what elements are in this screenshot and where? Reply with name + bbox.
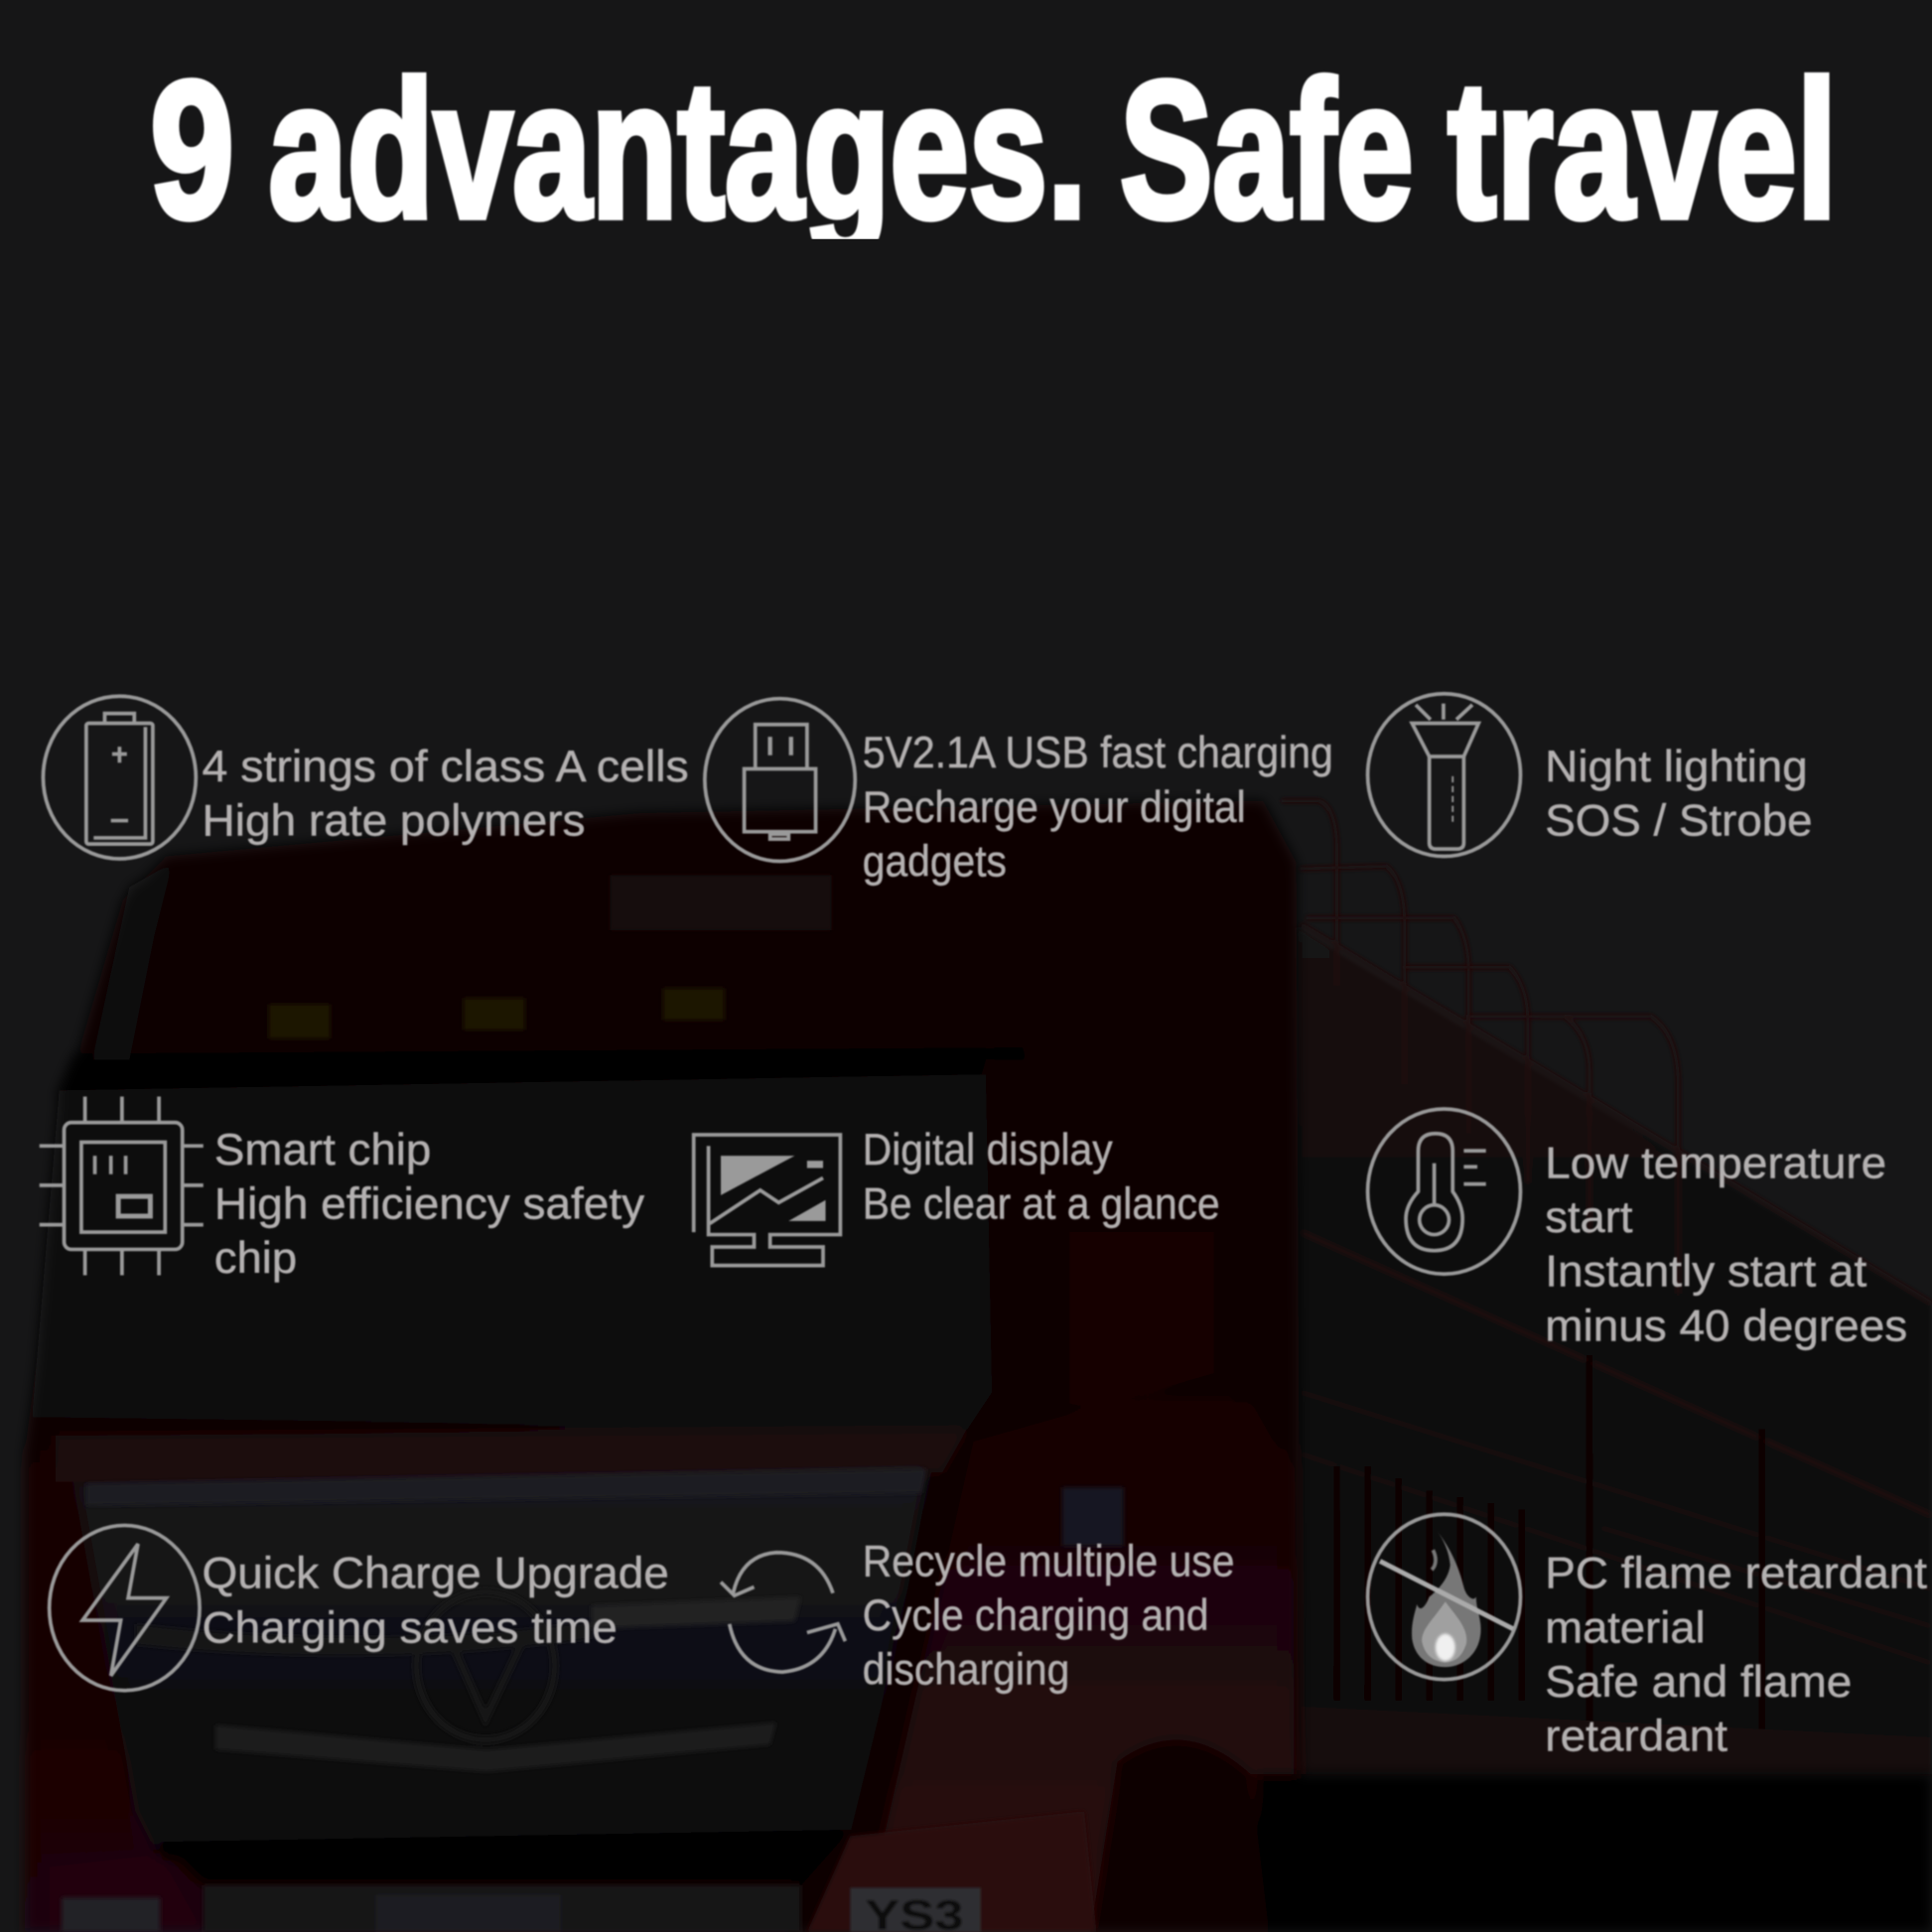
truck cargo fence	[1282, 801, 1932, 1774]
text: low temperature	[1545, 1139, 1907, 1350]
text: flame retardant	[1545, 1550, 1928, 1761]
license plate	[850, 1887, 981, 1932]
feature: quick charge	[50, 1525, 669, 1691]
text: quick charge: Charging saves time	[203, 1603, 618, 1652]
text: recycle: Recycle multiple use	[863, 1537, 1235, 1586]
title: Safe	[1120, 40, 1414, 258]
text: low temperature: Low temperature	[1545, 1139, 1886, 1187]
text: night lighting	[1545, 743, 1813, 845]
text: USB: 5V2.1A USB fast charging	[863, 729, 1333, 777]
text: smart chip	[214, 1126, 645, 1283]
text: cells: High rate polymers	[203, 796, 586, 845]
text: flame retardant: retardant	[1545, 1713, 1728, 1761]
text: smart chip: Smart chip	[214, 1126, 431, 1174]
icon: flashlight	[1368, 694, 1520, 857]
text: digital display: Be clear at a glance	[863, 1179, 1220, 1228]
title	[152, 71, 1831, 239]
icon: lightning bolt	[50, 1525, 200, 1691]
text: recycle: discharging	[863, 1646, 1069, 1695]
icon: USB plug	[705, 699, 855, 862]
icon: thermometer	[1368, 1109, 1520, 1274]
text: smart chip: High efficiency safety	[214, 1179, 645, 1228]
feature: recycle	[721, 1537, 1235, 1695]
text: digital display	[863, 1126, 1220, 1228]
truck cab body	[25, 801, 1932, 1932]
icon: chip	[40, 1097, 204, 1276]
text: quick charge: Quick Charge Upgrade	[203, 1550, 669, 1598]
text: USB: gadgets	[863, 837, 1007, 886]
text: cells: 4 strings of class A cells	[203, 743, 689, 791]
text: USB	[863, 729, 1333, 886]
feature: smart chip	[40, 1097, 645, 1283]
text: recycle	[863, 1537, 1235, 1695]
text: flame retardant: PC flame retardant	[1545, 1550, 1928, 1598]
text: smart chip: chip	[214, 1234, 297, 1283]
feature: night lighting	[1368, 694, 1813, 857]
feature: flame retardant	[1368, 1514, 1928, 1761]
feature: USB charging	[705, 699, 1333, 886]
feature: low temperature start	[1368, 1109, 1907, 1350]
icon: cycle arrows	[721, 1553, 845, 1672]
text: cells	[203, 743, 689, 845]
text: flame retardant: material	[1545, 1603, 1706, 1652]
text: USB: Recharge your digital	[863, 783, 1246, 832]
text: flame retardant: Safe and flame	[1545, 1658, 1852, 1707]
text: low temperature: Instantly start at	[1545, 1248, 1867, 1297]
text: recycle: Cycle charging and	[863, 1591, 1208, 1640]
icon: crossed-out flame	[1368, 1514, 1520, 1680]
text: night lighting: Night lighting	[1545, 743, 1808, 791]
text: night lighting: SOS / Strobe	[1545, 796, 1813, 845]
feature: digital display	[694, 1126, 1220, 1266]
icon: battery	[43, 696, 196, 859]
text: low temperature: minus 40 degrees	[1545, 1302, 1907, 1350]
background photo: red truck, darkened	[25, 801, 1932, 1932]
feature grid: 9 advantages	[40, 694, 1928, 1761]
text: low temperature: start	[1545, 1193, 1633, 1242]
icon: monitor	[694, 1135, 840, 1266]
text: quick charge	[203, 1550, 669, 1652]
truck grille bars	[62, 875, 1124, 1932]
title: 9	[150, 40, 234, 258]
title: advantages.	[269, 40, 1087, 258]
feature: battery cells	[43, 696, 689, 859]
text: digital display: Digital display	[863, 1126, 1113, 1174]
